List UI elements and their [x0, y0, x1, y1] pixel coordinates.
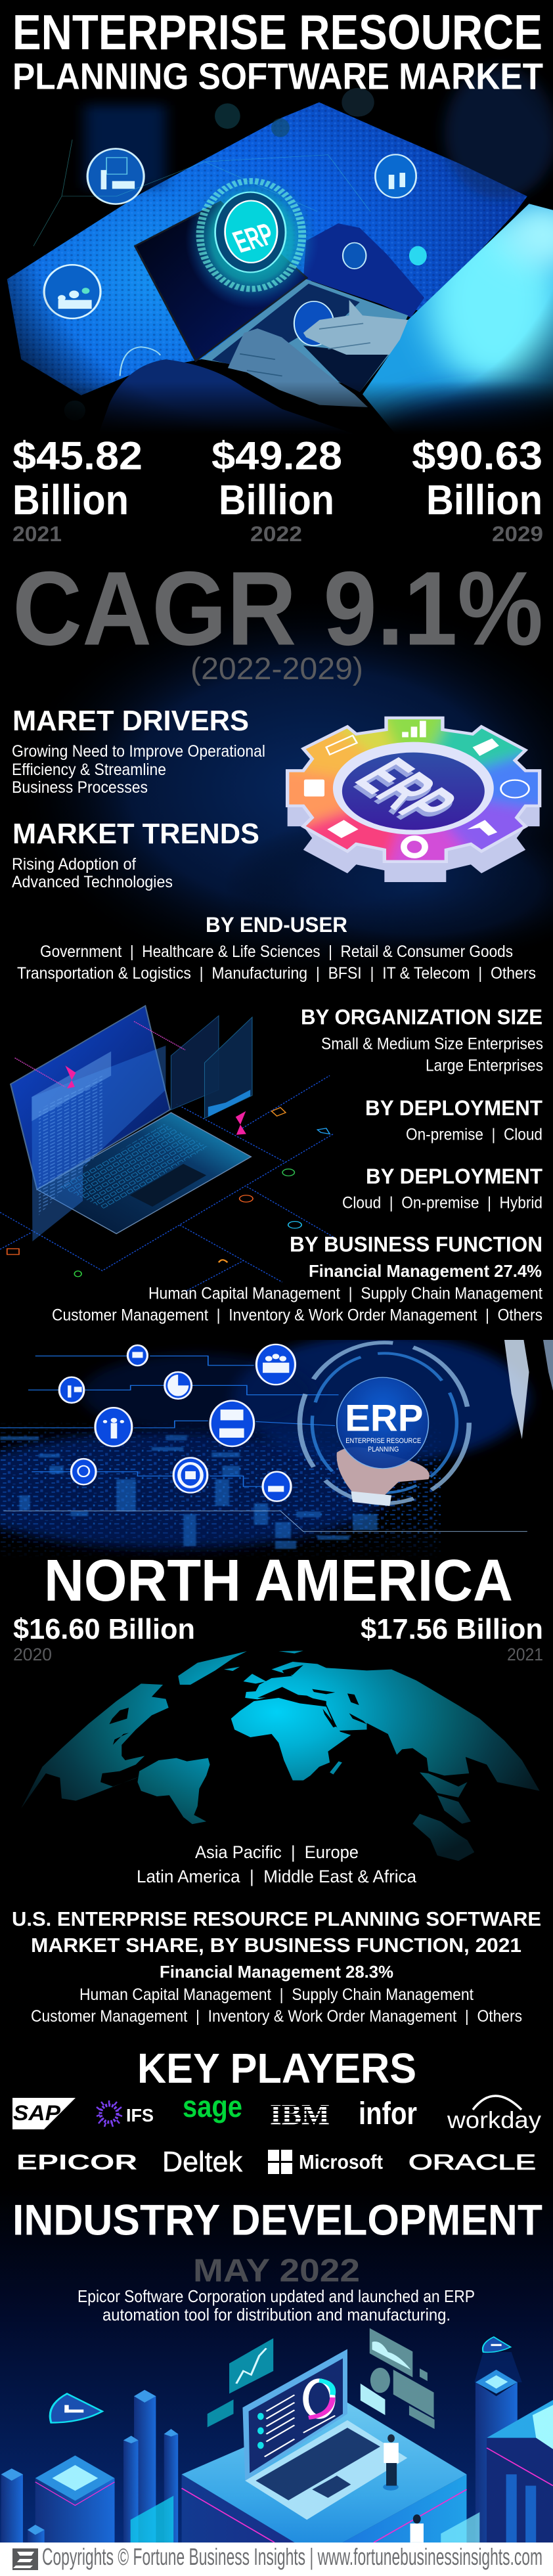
ERP touch image	[0, 1335, 553, 1560]
translucent window	[32, 1052, 111, 1121]
globe	[21, 1651, 540, 1861]
laptop base	[37, 1113, 251, 1233]
stat: 2021 North America: 2021	[507, 1645, 543, 1664]
far-right glow beam	[474, 2352, 522, 2382]
stat: 2021 North America: $17.56 Billion	[361, 1613, 543, 1645]
development date: MAY 2022	[193, 2253, 360, 2288]
footer band	[0, 2543, 553, 2576]
stat: 2020 North America	[13, 1613, 195, 1664]
outer ring arc	[299, 1343, 469, 1503]
keyboard keys	[212, 284, 360, 368]
land: Australia	[412, 1814, 474, 1861]
icon: clock	[501, 780, 529, 797]
laptop base	[245, 2420, 407, 2520]
icon: folder	[7, 1249, 19, 1255]
chart panel	[229, 2338, 273, 2393]
floating sheet back	[171, 1015, 219, 1110]
market drivers text: Efficiency & Streamline	[12, 761, 166, 779]
isometric laptop illustration	[0, 1006, 335, 1291]
trackpad	[130, 1164, 206, 1207]
section: by deployment 2: BY DEPLOYMENT	[366, 1165, 542, 1188]
heading: U.S. market share	[12, 1907, 541, 1957]
icon circles	[59, 1344, 295, 1501]
sleeve	[363, 204, 553, 430]
cyan translucent panel left	[131, 2496, 173, 2543]
ERP disc text: ENTERPRISE RESOURCE	[345, 1437, 421, 1445]
connector lines	[0, 1356, 339, 1486]
section: by deployment 1	[365, 1096, 542, 1144]
keyboard	[255, 2428, 380, 2500]
laptop screen	[135, 202, 307, 361]
stat: 2029 market size: Billion	[426, 476, 542, 523]
gear extrusion	[288, 738, 540, 882]
haze centre	[79, 1349, 257, 1438]
touch circle on keyboard	[294, 301, 334, 345]
icon: bus	[473, 738, 499, 756]
hero image: laptop with ERP hologram	[0, 0, 553, 470]
laptop screen	[11, 1006, 170, 1189]
land: Eurasia	[245, 1662, 540, 1791]
blanket	[7, 102, 527, 395]
pink trims	[182, 2488, 466, 2543]
shield right	[483, 2337, 511, 2352]
section: by deployment 1: On-premise | Cloud	[406, 1126, 542, 1144]
tower right	[164, 2429, 178, 2543]
ERP 3D letters: ERP	[339, 747, 475, 833]
heading: market trends: MARKET TRENDS	[12, 818, 259, 850]
stat: 2022 market size: Billion	[219, 476, 334, 523]
ERP gear illustration	[285, 716, 541, 882]
icon: calculator	[327, 820, 359, 838]
logo: EPICOR: EPICOR	[16, 2150, 137, 2174]
cyan translucent panel right	[441, 2512, 479, 2543]
hologram glow	[185, 170, 319, 308]
background glow upper-left	[85, 105, 166, 188]
faint icon circles	[64, 88, 374, 420]
dotted grid lines	[0, 1076, 335, 1291]
gear rim	[288, 718, 540, 862]
logo: IBM: IBM	[270, 2099, 330, 2131]
strip panel	[409, 2405, 435, 2429]
pie badge	[370, 2368, 390, 2393]
stat: 2021 market size: $45.82	[12, 433, 143, 478]
market trends text: Advanced Technologies	[12, 873, 173, 891]
mini chart	[208, 1090, 250, 1117]
inland seas and lakes	[109, 1665, 366, 1745]
central block top	[182, 2403, 466, 2556]
stat: 2022 market size	[211, 433, 342, 546]
stat: 2022 market size: 2022	[250, 522, 302, 546]
network lines	[33, 140, 370, 246]
knee	[303, 223, 424, 318]
title	[12, 5, 543, 97]
icon: pin	[468, 820, 497, 835]
suit stripe far	[543, 1340, 553, 1391]
market drivers text	[12, 742, 265, 797]
heart icon circle	[409, 246, 427, 265]
icon: envelope	[271, 1107, 286, 1116]
logo: IFS	[97, 2100, 154, 2127]
section: by business function	[52, 1232, 542, 1324]
icon glyphs	[68, 1352, 289, 1492]
laptop screen	[242, 2349, 347, 2481]
other regions list: Latin America | Middle East & Africa	[137, 1867, 417, 1886]
vignette	[0, 0, 553, 433]
icon: cog	[404, 838, 425, 856]
land: South America	[137, 1758, 210, 1824]
section: by organization size: Large Enterprises	[426, 1056, 543, 1075]
ERP 3D shadow: ERP	[338, 752, 473, 837]
market drivers text: Business Processes	[12, 778, 148, 797]
end-user list: Government | Healthcare & Life Sciences | Retail & Consumer Goods	[40, 943, 513, 961]
hourglass 1	[65, 1065, 76, 1088]
heading: by end-user: BY END-USER	[206, 913, 347, 937]
icon: sun	[74, 1271, 81, 1277]
logo: sage: sage	[183, 2089, 242, 2123]
person standing	[383, 2434, 399, 2491]
stat: 2020 North America: 2020	[13, 1645, 52, 1664]
left hand	[228, 328, 368, 407]
market trends text	[12, 855, 173, 891]
outer glow ring	[215, 192, 286, 273]
icon: wifi	[219, 1260, 227, 1262]
icon: chat	[282, 1169, 294, 1176]
U.S. share details: Human Capital Management | Supply Chain Management	[79, 1986, 474, 2004]
mid ring arc	[312, 1353, 456, 1493]
left tower tall	[134, 2390, 156, 2543]
magenta code line 1	[15, 1058, 65, 1087]
logo: Microsoft	[268, 2150, 383, 2174]
U.S. share details: Financial Management 28.3%	[160, 1962, 393, 1982]
suit stripe	[504, 1340, 529, 1439]
under-hand shadow	[303, 345, 388, 392]
horizontal tech line	[3, 1511, 527, 1532]
hand	[337, 1447, 430, 1496]
shield left	[50, 2393, 102, 2423]
heading: U.S. market share: U.S. ENTERPRISE RESOURCE PLANNING SOFTWARE	[12, 1907, 541, 1930]
small icon circle	[343, 243, 366, 269]
binary code column	[39, 1076, 102, 1215]
right hand	[303, 300, 408, 355]
logo: workday	[447, 2096, 541, 2133]
center well	[342, 753, 485, 830]
heading: north america: NORTH AMERICA	[44, 1548, 513, 1614]
footer	[0, 2543, 553, 2576]
stat: 2029 market size: 2029	[492, 522, 543, 546]
development description: Epicor Software Corporation updated and launched an ERP	[77, 2286, 475, 2306]
logo: Microsoft: Microsoft	[299, 2150, 383, 2173]
cuff	[351, 1492, 391, 1506]
icon: envelope	[304, 780, 324, 797]
logo: IFS: IFS	[126, 2105, 154, 2125]
heading: market drivers: MARET DRIVERS	[12, 705, 249, 737]
logo: Deltek: Deltek	[162, 2146, 243, 2178]
laptop base	[201, 279, 408, 392]
block left	[35, 2455, 115, 2543]
market drivers text: Growing Need to Improve Operational	[12, 742, 265, 761]
trousers	[99, 359, 353, 433]
city haze	[0, 1431, 388, 1549]
upper dark shadow at right	[445, 66, 553, 199]
ERP hologram rings	[200, 181, 302, 289]
land: Indonesia	[437, 1795, 471, 1824]
open ring lower-left	[120, 347, 160, 376]
icon circle: presentation	[87, 148, 144, 204]
central block left wall	[182, 2474, 317, 2556]
icon circle: people	[44, 265, 100, 319]
ERP disc	[337, 1377, 428, 1469]
isometric city illustration	[1, 2328, 553, 2556]
ERP disc	[225, 201, 277, 263]
heading: U.S. market share: MARKET SHARE, BY BUSINESS FUNCTION, 2021	[31, 1934, 521, 1957]
bottom gradient background	[0, 2187, 553, 2545]
land: UK	[244, 1674, 266, 1683]
land: Africa	[231, 1698, 351, 1781]
icon circle: two people	[375, 154, 416, 198]
icon: card	[326, 736, 357, 755]
other regions list: Asia Pacific | Europe	[195, 1842, 359, 1862]
note panel	[208, 2399, 233, 2427]
ERP disc text: ERP	[345, 1398, 423, 1440]
stat: 2029 market size	[412, 433, 543, 546]
land: arctic sliver	[278, 1651, 303, 1653]
bottom fade	[0, 382, 553, 433]
right block	[487, 2400, 553, 2543]
blanket texture	[7, 102, 527, 395]
stat: 2020 North America: $16.60 Billion	[13, 1613, 195, 1645]
land: Madagascar	[330, 1762, 342, 1775]
icon: cloud blue	[288, 1222, 301, 1228]
tower far left	[1, 2468, 23, 2543]
logo: SAP	[12, 2098, 76, 2129]
stat: 2022 market size: $49.28	[211, 433, 342, 478]
city bright blocks	[0, 1435, 378, 1549]
section: by deployment 1: BY DEPLOYMENT	[365, 1096, 542, 1120]
blue haze	[232, 1335, 529, 1463]
image panel	[361, 2384, 385, 2415]
stat: 2021 market size: 2021	[12, 522, 62, 546]
development description	[77, 2286, 475, 2324]
central block right wall	[317, 2474, 466, 2556]
navy glow behind by end-user	[223, 808, 553, 966]
footer logo	[12, 2548, 38, 2570]
trackpad	[312, 2476, 351, 2498]
heading: key players: KEY PLAYERS	[137, 2045, 416, 2092]
land: Iceland	[224, 1667, 240, 1671]
section: by business function: BY BUSINESS FUNCTION	[290, 1232, 542, 1256]
keys	[60, 1124, 208, 1209]
section: by deployment 2	[342, 1165, 542, 1212]
small front block	[28, 2525, 45, 2543]
section: by business function: Financial Management 27.4%	[309, 1261, 542, 1281]
icon: bars	[402, 721, 426, 737]
section: by organization size: BY ORGANIZATION SIZE	[301, 1005, 542, 1029]
stat: 2021 market size: Billion	[12, 476, 129, 523]
icon: lightning	[317, 1128, 330, 1134]
stat: 2029 market size: $90.63	[412, 433, 542, 478]
right tower	[476, 2370, 518, 2543]
small grey panel	[420, 2368, 428, 2381]
land: Southeast Asia islands	[420, 1772, 468, 1798]
icon: cloud orange	[240, 1195, 253, 1202]
magenta code line 2	[134, 1021, 185, 1050]
stat: 2021 North America	[361, 1613, 543, 1664]
logo: infor: infor	[359, 2097, 417, 2131]
ERP disc text	[346, 1405, 422, 1452]
navy glow behind gear	[7, 591, 553, 985]
wave panel	[370, 2328, 412, 2377]
market trends text: Rising Adoption of	[12, 855, 136, 874]
U.S. share details	[31, 1962, 522, 2026]
CAGR period: (2022-2029)	[190, 651, 363, 686]
translucent panel big	[32, 1046, 166, 1241]
land: North America	[21, 1683, 169, 1808]
person lower	[410, 2514, 424, 2543]
large grey panel	[393, 2370, 434, 2418]
logo: SAP: SAP	[13, 2101, 61, 2125]
development description: automation tool for distribution and manufacturing.	[102, 2305, 451, 2324]
section: by organization size	[301, 1005, 543, 1075]
ERP disc text: PLANNING	[368, 1446, 399, 1454]
hourglass 2	[236, 1111, 246, 1135]
other regions list	[137, 1842, 417, 1886]
logo: workday: workday	[447, 2106, 541, 2133]
city lights	[0, 1420, 441, 1560]
floating sheet front with chart	[204, 1017, 252, 1119]
land: Greenland	[178, 1651, 247, 1685]
center ring	[333, 742, 494, 835]
ERP label: ERP	[228, 217, 280, 259]
tower small	[123, 2436, 139, 2543]
stat: 2021 market size	[12, 433, 143, 546]
logo: ORACLE: ORACLE	[409, 2150, 536, 2174]
end-user list	[17, 943, 536, 983]
gear rainbow top face	[289, 719, 538, 860]
